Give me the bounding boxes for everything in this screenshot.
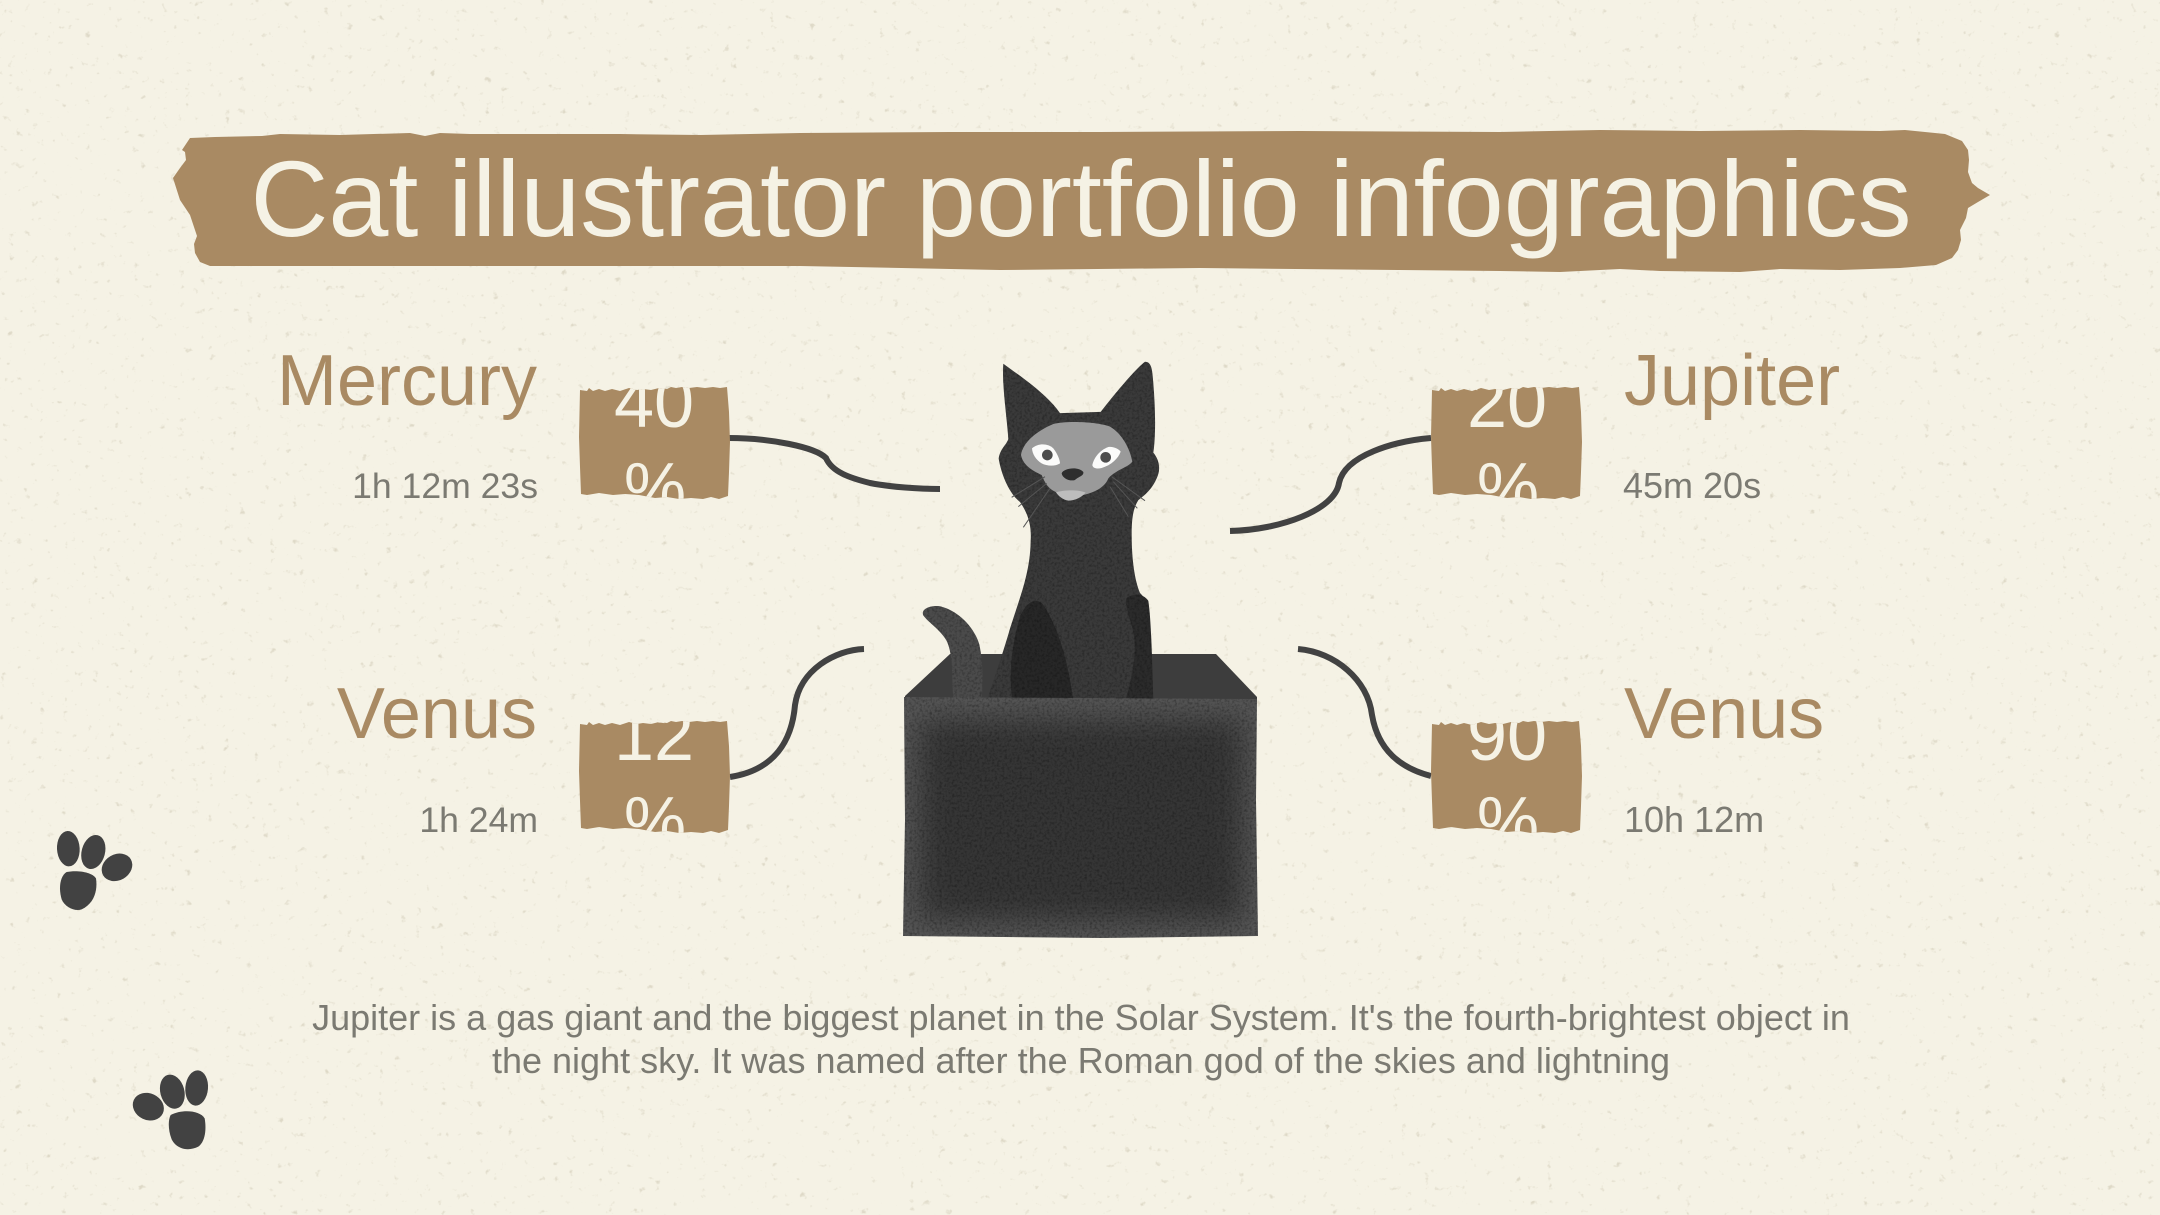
whiskers xyxy=(1012,477,1145,527)
title banner xyxy=(173,130,1990,272)
item: Venus left xyxy=(337,688,730,833)
box front xyxy=(903,697,1258,938)
Jupiter percent badge xyxy=(1431,387,1582,499)
connector: Venus right badge to box xyxy=(1298,649,1431,776)
Venus left duration: 1h 24m xyxy=(419,800,538,840)
banner brush shape xyxy=(173,130,1990,272)
item: Mercury xyxy=(282,355,730,499)
Mercury percent badge: 40 xyxy=(614,363,694,443)
Venus left percent badge: % xyxy=(624,782,686,860)
description line 2: the night sky. It was named after the Roman god of the skies and lightning xyxy=(492,1040,1670,1081)
description line 1: Jupiter is a gas giant and the biggest planet in the Solar System. It's the fourth-brightest object in xyxy=(312,997,1850,1038)
paw print: lower xyxy=(128,1069,209,1149)
Venus right duration: 10h 12m xyxy=(1624,799,1764,840)
cat left haunch xyxy=(1011,601,1073,702)
Venus right heading: Venus xyxy=(1624,674,1824,754)
cat body and head xyxy=(987,362,1159,702)
Jupiter percent badge: 20 xyxy=(1467,363,1547,443)
Venus left percent badge: 12 xyxy=(614,696,694,776)
Venus left percent badge xyxy=(579,721,730,833)
Jupiter duration: 45m 20s xyxy=(1623,465,1761,506)
Mercury percent badge: % xyxy=(624,448,686,526)
item: Jupiter xyxy=(1431,352,1839,499)
Venus right percent badge: 90 xyxy=(1467,696,1547,776)
cat face xyxy=(1012,422,1145,527)
left pupil xyxy=(1042,450,1053,460)
cat right leg xyxy=(1125,595,1153,702)
connector: Venus left badge to box xyxy=(730,649,864,777)
description text xyxy=(312,997,1850,1081)
right pupil xyxy=(1100,452,1111,463)
Mercury heading: Mercury xyxy=(277,341,537,421)
connector: Mercury badge to cat xyxy=(729,438,940,489)
item: Venus right xyxy=(1431,688,1822,833)
Mercury percent badge xyxy=(579,387,730,499)
Venus right percent badge xyxy=(1431,721,1582,833)
Jupiter heading: Jupiter xyxy=(1624,341,1840,421)
cat body group xyxy=(923,362,1159,702)
title text: Cat illustrator portfolio infographics xyxy=(250,138,1912,259)
face mask xyxy=(1021,422,1132,496)
connector: Jupiter badge to cat xyxy=(1230,438,1431,531)
box interior xyxy=(905,654,1257,702)
right eye xyxy=(1092,447,1121,469)
nose xyxy=(1062,468,1083,480)
illustration: black cat in box xyxy=(903,362,1258,938)
Jupiter percent badge: % xyxy=(1477,448,1539,526)
Mercury duration: 1h 12m 23s xyxy=(352,466,538,506)
Venus right percent badge: % xyxy=(1477,782,1539,860)
chin xyxy=(1056,490,1086,501)
paw print: upper xyxy=(56,830,137,910)
Venus left heading: Venus xyxy=(337,674,537,754)
left eye xyxy=(1032,444,1060,466)
cat tail xyxy=(923,606,983,700)
